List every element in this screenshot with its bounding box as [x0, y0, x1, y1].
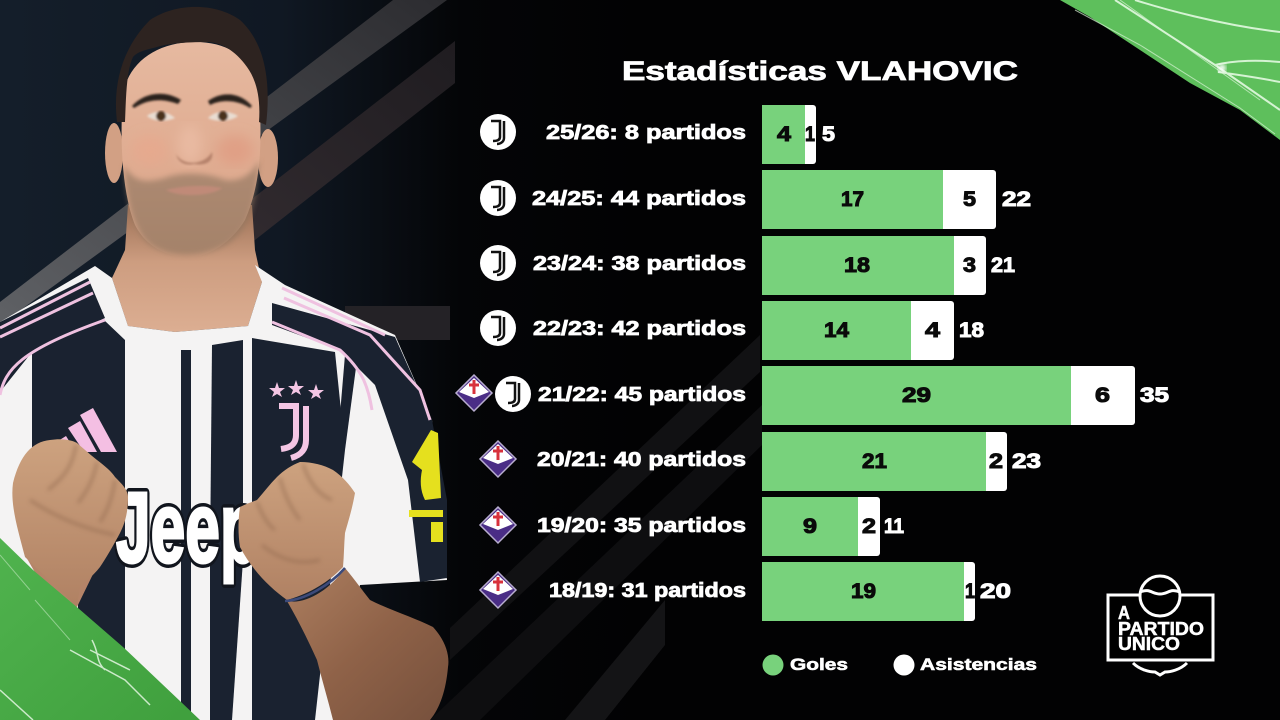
right fist: [238, 462, 355, 600]
assists value: 5: [963, 188, 976, 211]
fiorentina badge: [480, 507, 516, 543]
total value: 23: [1012, 450, 1041, 473]
goals bar: [762, 497, 858, 556]
assists bar: [762, 497, 880, 556]
adidas logo: [58, 408, 117, 452]
row 22/23: [480, 301, 984, 360]
row 20/21: [480, 432, 1041, 491]
jersey dark stripes: [0, 278, 447, 720]
eyebrows: [132, 94, 252, 108]
total value: 21: [991, 254, 1015, 277]
assists value: 3: [963, 254, 976, 277]
forearm: [287, 568, 448, 720]
juventus badge: [480, 245, 516, 281]
season label: 21/22: 45 partidos: [538, 384, 746, 406]
wristband: [285, 568, 345, 601]
row 25/26: [480, 105, 835, 164]
green wrap bottom-left: [0, 538, 200, 720]
a partido unico logo: PARTIDO: [1118, 619, 1204, 639]
assists value: 1: [805, 123, 815, 146]
assists bar: [762, 236, 986, 295]
row 24/25: [480, 170, 1031, 229]
goals value: 19: [851, 580, 876, 603]
assists label: Asistencias: [920, 655, 1037, 674]
cheeks and nose shading: [132, 125, 253, 165]
assists value: 4: [925, 319, 940, 342]
assists value: 2: [862, 515, 876, 538]
goals value: 18: [844, 254, 870, 277]
goals bar: [762, 366, 1071, 425]
juventus badge: [495, 376, 531, 412]
mouth: [166, 186, 222, 195]
beard: [124, 160, 259, 255]
goals bar: [762, 170, 943, 229]
neck: [112, 205, 262, 332]
row 21/22: [456, 366, 1169, 425]
jeep sponsor text: Jeep: [116, 472, 258, 584]
assists swatch: [894, 654, 914, 676]
hair: [116, 7, 268, 125]
assists bar: [762, 105, 816, 164]
a partido unico logo: [1108, 576, 1213, 675]
goals swatch: [762, 654, 784, 676]
juventus crest on shirt: [269, 380, 324, 458]
season label: 24/25: 44 partidos: [532, 188, 746, 210]
green wrap top-right: [1060, 0, 1280, 140]
nose: [176, 152, 212, 165]
total value: 20: [980, 580, 1011, 603]
fiorentina badge: [456, 375, 492, 411]
assists bar: [762, 301, 954, 360]
assists bar: [762, 366, 1135, 425]
goals bar: [762, 236, 954, 295]
background diagonal stripes: [0, 0, 762, 720]
total value: 22: [1002, 188, 1031, 211]
total value: 5: [822, 123, 835, 146]
legend: [762, 654, 1037, 676]
total value: 35: [1140, 384, 1169, 407]
goals value: 17: [841, 188, 864, 211]
left wrist: [25, 555, 95, 607]
total value: 18: [959, 319, 984, 342]
jersey pink trims: [0, 282, 430, 420]
sleeve sponsor: [409, 430, 443, 542]
assists bar: [762, 432, 1007, 491]
fiorentina badge: [480, 441, 516, 477]
row 18/19: [480, 562, 1011, 621]
left fist: [12, 439, 128, 607]
juventus badge: [480, 180, 516, 216]
goals value: 9: [803, 515, 817, 538]
season label: 18/19: 31 partidos: [549, 580, 746, 602]
jeep sponsor text: [116, 472, 258, 584]
eyes: [147, 111, 238, 121]
total value: 11: [884, 515, 904, 538]
goals bar: [762, 301, 911, 360]
jersey body: [0, 265, 447, 720]
ears: [105, 123, 278, 187]
a partido unico logo: UNICO: [1118, 634, 1180, 654]
season label: 19/20: 35 partidos: [537, 515, 746, 537]
assists value: 2: [989, 450, 1003, 473]
fiorentina badge: [480, 572, 516, 608]
goals value: 21: [862, 450, 887, 473]
face: [122, 42, 260, 257]
row 23/24: [480, 236, 1015, 295]
jeep sponsor text: Jeep: [116, 472, 258, 584]
juventus badge: [480, 114, 516, 150]
goals value: 4: [777, 123, 791, 146]
player photo illustration: [0, 7, 448, 720]
assists bar: [762, 170, 996, 229]
goals value: 14: [824, 319, 849, 342]
goals label: Goles: [790, 655, 848, 674]
goals bar: [762, 105, 805, 164]
a partido unico logo: A: [1118, 603, 1130, 623]
season label: 25/26: 8 partidos: [546, 122, 746, 144]
goals value: 29: [902, 384, 931, 407]
title: Estadísticas VLAHOVIC: [622, 56, 1018, 86]
season label: 20/21: 40 partidos: [537, 449, 746, 471]
assists bar: [762, 562, 975, 621]
assists value: 6: [1095, 384, 1110, 407]
row 19/20: [480, 497, 904, 556]
goals bar: [762, 562, 964, 621]
season label: 23/24: 38 partidos: [533, 253, 746, 275]
season label: 22/23: 42 partidos: [533, 318, 746, 340]
assists value: 1: [965, 580, 975, 603]
juventus badge: [480, 310, 516, 346]
goals bar: [762, 432, 986, 491]
